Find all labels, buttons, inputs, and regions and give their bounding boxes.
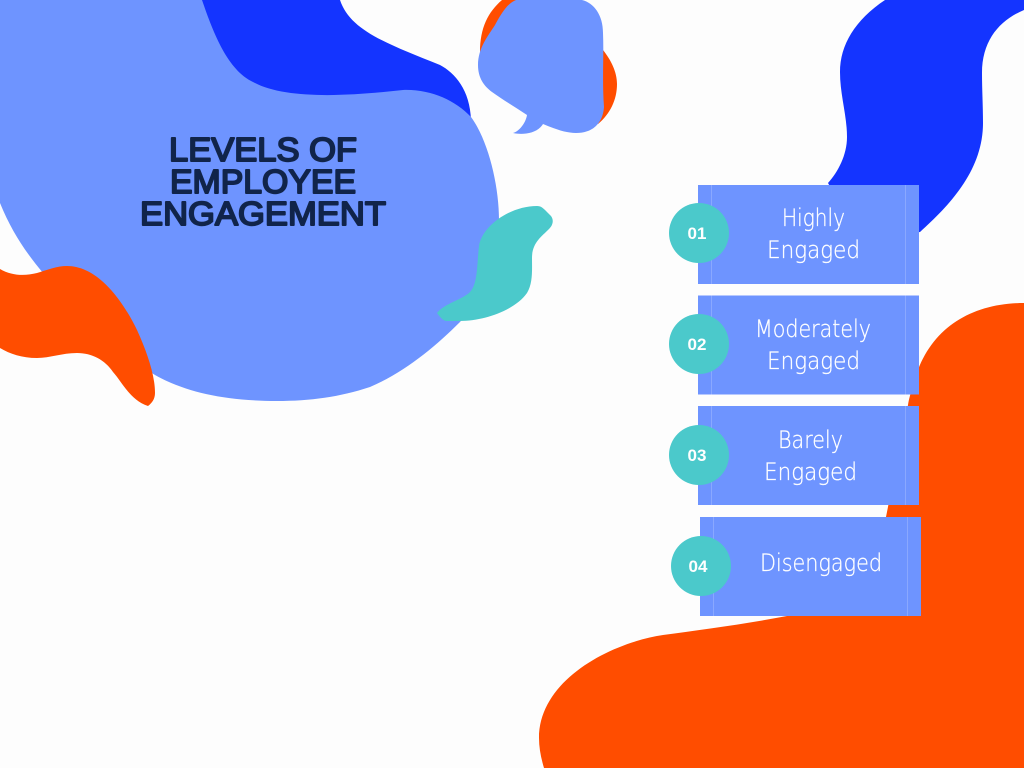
level 01: Highly Engaged: [669, 185, 919, 284]
blob: teal accent: [437, 206, 553, 321]
level 02: Moderately Engaged: Engaged: [767, 347, 860, 375]
blob: orange left: [0, 266, 155, 406]
title: ENGAGEMENT: [140, 195, 386, 232]
level 02: Moderately Engaged: Moderately: [755, 315, 871, 343]
level 01: Highly Engaged: 01: [688, 224, 706, 243]
title: EMPLOYEE: [170, 163, 356, 200]
level 03: Barely Engaged: Engaged: [764, 458, 857, 486]
level 03: Barely Engaged: [669, 406, 919, 505]
title: [140, 131, 386, 232]
blob: orange behind speech bubble: [480, 0, 617, 124]
title: LEVELS OF: [169, 131, 357, 168]
level 01: Highly Engaged: Engaged: [767, 236, 860, 264]
icon: speech bubble: [478, 0, 604, 134]
blob: orange bottom right: [539, 303, 1024, 768]
level 03: Barely Engaged: Barely: [778, 426, 843, 454]
level 04: Disengaged: 04: [689, 557, 708, 576]
level 02: Moderately Engaged: [669, 296, 919, 394]
level 03: Barely Engaged: 03: [688, 446, 706, 465]
level 04: Disengaged: [671, 517, 921, 616]
blob: dark blue top right: [828, 0, 1024, 240]
blob: light blue main: [0, 0, 499, 401]
level 01: Highly Engaged: Highly: [782, 204, 845, 232]
blob: dark blue top left: [200, 0, 471, 160]
level 04: Disengaged: Disengaged: [760, 549, 882, 577]
level 02: Moderately Engaged: 02: [688, 335, 706, 354]
